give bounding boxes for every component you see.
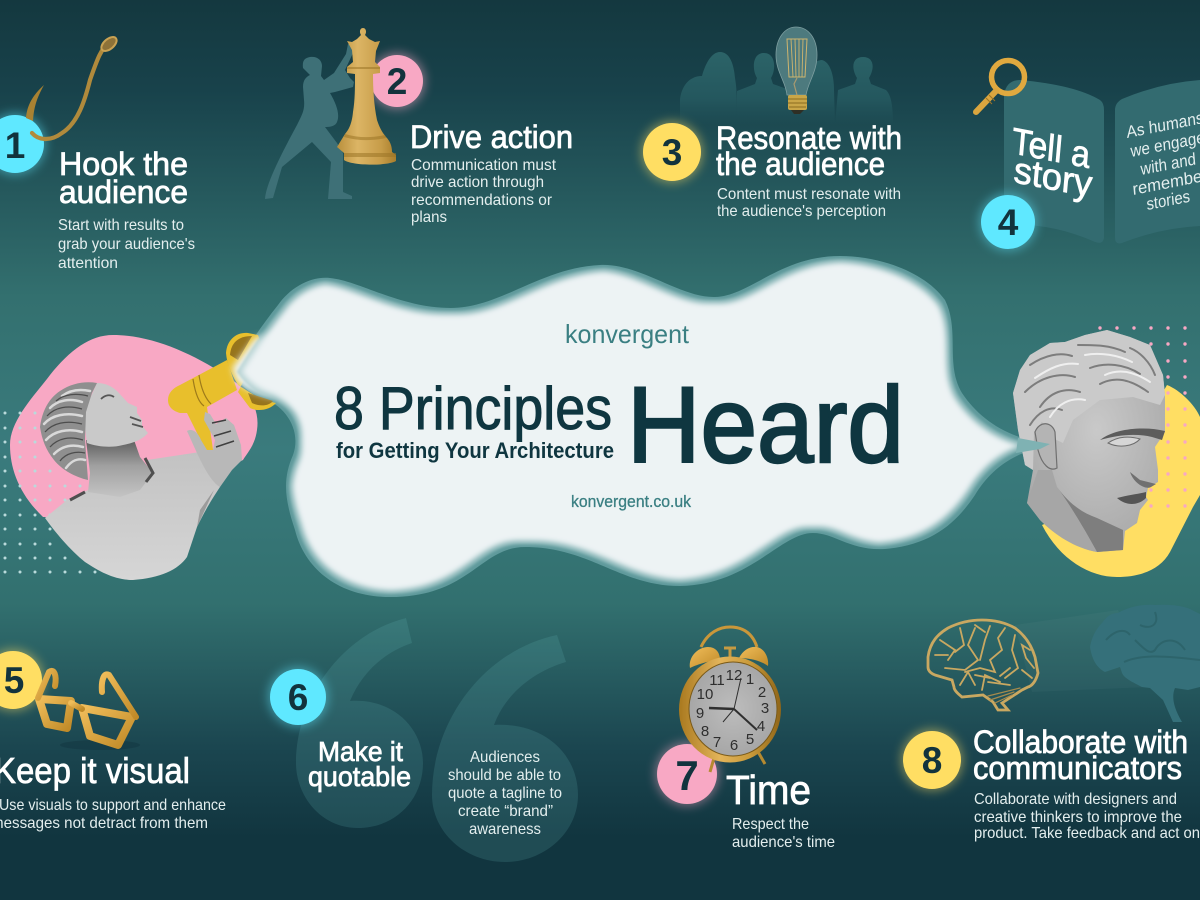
icon: gold chess queen (337, 28, 396, 165)
clock numerals: 3 (761, 700, 769, 717)
body text: audience's time (732, 834, 835, 851)
heading: communicators (973, 750, 1182, 786)
body text: attention (58, 255, 118, 272)
body text: drive action through (411, 174, 544, 191)
badge 2 (369, 53, 425, 109)
body text: recommendations or (411, 192, 553, 209)
left statue group: pink blob, dots, statue (4, 335, 258, 580)
body text: quote a tagline to (448, 785, 562, 802)
badge 1: 1 (5, 125, 25, 166)
body text (732, 816, 835, 851)
badge 7 (655, 742, 719, 806)
badge 4: 4 (998, 202, 1019, 243)
heading (973, 724, 1188, 786)
icon: edison bulb (776, 27, 817, 114)
statue neck (86, 440, 153, 497)
principle 7: time (655, 627, 835, 851)
body text: creative thinkers to improve the (974, 809, 1182, 826)
body text: Communication must (411, 157, 557, 174)
heading (308, 736, 411, 792)
body text, sheared: stories (1146, 187, 1191, 214)
statue hair (40, 382, 97, 480)
body text (411, 157, 557, 226)
silhouette: large brain (1090, 605, 1200, 722)
body text (58, 217, 195, 272)
book: right page (1115, 80, 1200, 243)
subtitle: for Getting Your Architecture (336, 438, 614, 463)
statue arm shadow (197, 490, 214, 527)
badge 1 (0, 113, 46, 175)
title: Heard: Heard (627, 364, 904, 485)
quote mark right (432, 635, 578, 862)
badge 8: 8 (922, 740, 942, 781)
heading: Resonate with (716, 120, 902, 156)
clock numerals: 6 (730, 737, 738, 754)
clock numerals: 4 (757, 718, 765, 735)
body text: Respect the (732, 816, 809, 833)
clock numerals: 9 (696, 705, 704, 722)
principle 6: make it quotable (268, 618, 578, 862)
heading: the audience (716, 146, 885, 182)
principle 5: keep it visual (0, 649, 226, 832)
clock numerals: 2 (758, 684, 766, 701)
pink blob (10, 335, 258, 520)
badge 5: 5 (4, 660, 24, 701)
icon: magnifying glass (976, 60, 1024, 112)
speech blob: teal tip entering the ear (1016, 438, 1050, 453)
speech blob: outer layer (232, 256, 1050, 597)
head: base silhouette (1013, 330, 1165, 552)
badge 8 (901, 729, 963, 791)
heading (59, 146, 188, 210)
body text: Audiences (470, 749, 540, 766)
heading: Hook the (59, 146, 188, 182)
body text: the audience's perception (717, 203, 886, 220)
silhouette: man pushing (265, 44, 354, 199)
heading: Keep it visual (0, 750, 190, 791)
body text: awareness (469, 821, 541, 838)
body text (974, 791, 1200, 842)
clock numerals: 12 (726, 667, 742, 684)
right statue group: yellow blob, dots, head (1013, 326, 1200, 577)
head: neck shadow (1057, 487, 1123, 552)
icon: yellow megaphone (168, 333, 276, 452)
clock numerals: 7 (713, 734, 721, 751)
clock numerals: 10 (697, 686, 713, 703)
body text (717, 186, 901, 220)
heading, sheared: story (1012, 148, 1094, 205)
body text (0, 797, 226, 832)
head: brow shadow, eye, nose, lips (1100, 428, 1165, 504)
principle 3: resonate with the audience (641, 27, 902, 220)
heading, sheared (1010, 119, 1094, 205)
head: ear (1035, 424, 1057, 469)
logo: konvergent: konvergent (565, 319, 690, 349)
dots pattern (1098, 326, 1187, 508)
body text: create “brand” (458, 803, 553, 820)
body text: Content must resonate with (717, 186, 901, 203)
principle 1: hook the audience (0, 34, 195, 272)
url: konvergent.co.uk (571, 492, 691, 511)
body text (448, 749, 562, 838)
quote mark left (296, 618, 423, 828)
heading: audience (59, 174, 188, 210)
body text: should be able to (448, 767, 561, 784)
statue torso (45, 452, 220, 580)
title: 8 Principles: 8 Principles (334, 375, 612, 442)
badge 6 (268, 667, 328, 727)
heading, sheared: Tell a (1010, 119, 1092, 176)
body text: Use visuals to support and enhance (0, 797, 226, 814)
body text: plans (411, 209, 447, 226)
icon: gold alarm clock (679, 627, 781, 772)
heading: quotable (308, 761, 411, 792)
clock numerals: 5 (746, 731, 754, 748)
badge 6: 6 (288, 677, 308, 718)
beam between brains (1015, 610, 1148, 692)
yellow blob (1042, 385, 1200, 577)
clock numerals (696, 667, 769, 754)
clock numerals: 1 (746, 671, 754, 688)
body text, sheared (1127, 114, 1200, 210)
statue face (84, 383, 148, 447)
heading: Time (726, 767, 811, 813)
heading: Drive action (410, 119, 573, 155)
icon: gold glasses (38, 671, 140, 750)
body text: grab your audience's (58, 236, 195, 253)
dots pattern (4, 412, 96, 574)
heading: Collaborate with (973, 724, 1188, 760)
badge 7: 7 (675, 752, 699, 799)
principle 4: tell a story (976, 60, 1200, 251)
statue eye and mouth (101, 395, 143, 427)
body text: Collaborate with designers and (974, 791, 1177, 808)
heading (716, 120, 902, 182)
principle 2: drive action (265, 28, 573, 226)
statue hand holding megaphone (187, 412, 242, 487)
speech blob: mid tint (232, 256, 1050, 597)
principle 8: collaborate with communicators (901, 605, 1200, 842)
clock numerals: 11 (709, 672, 725, 689)
head: hair (1013, 330, 1165, 470)
speech blob: white tip at the megaphone (232, 330, 300, 410)
badge 5 (0, 649, 44, 711)
book: left page (1004, 80, 1104, 243)
statue collar shadow (70, 458, 153, 500)
clock numerals: 8 (701, 723, 709, 740)
badge 3: 3 (662, 132, 682, 173)
badge 3 (641, 121, 703, 183)
speech blob: inner white (232, 256, 1050, 597)
icon: gold fish hook (26, 34, 119, 139)
badge 2: 2 (387, 61, 407, 102)
clock hands (709, 678, 757, 730)
icon: gold brain outline (928, 620, 1038, 710)
head: neck left tone (1027, 470, 1097, 552)
silhouette: audience crowd (680, 52, 893, 125)
central title block (334, 319, 904, 511)
badge 4 (979, 193, 1037, 251)
body text: Start with results to (58, 217, 184, 234)
heading: Make it (318, 736, 403, 767)
